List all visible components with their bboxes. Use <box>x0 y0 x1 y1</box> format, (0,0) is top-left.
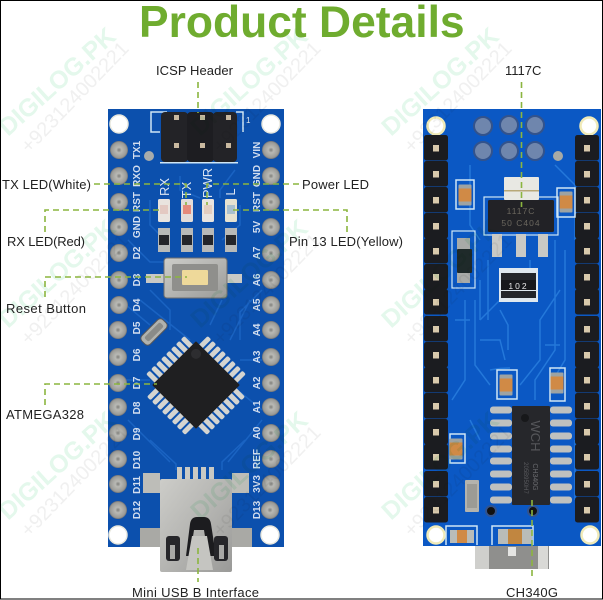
four status LEDs <box>158 199 237 222</box>
left pin labels: RXO <box>132 165 143 187</box>
right pin labels: A6 <box>252 273 263 286</box>
right pin labels: A0 <box>252 426 263 439</box>
watermarks: +923124002221 <box>17 38 133 157</box>
watermarks: +923124002221 <box>400 422 516 541</box>
label: ATMEGA328 <box>6 384 157 422</box>
watermarks: +923124002221 <box>17 422 133 541</box>
resistor array 102: 102 <box>508 281 529 291</box>
label: ATMEGA328: ATMEGA328 <box>6 407 84 422</box>
corner mounting holes <box>109 115 280 544</box>
right pin labels <box>252 142 263 519</box>
LED silkscreen labels <box>157 168 238 198</box>
left pin pads <box>109 141 128 519</box>
diode <box>452 231 475 288</box>
watermarks: +923124002221 <box>209 422 325 541</box>
PCB traces <box>120 170 262 470</box>
left pin labels: D10 <box>132 450 143 469</box>
left pin labels: D5 <box>132 321 143 334</box>
corner mounting holes <box>428 118 598 544</box>
left pin labels: D2 <box>132 246 143 259</box>
right pin labels: REF <box>252 449 263 469</box>
right pin labels: A2 <box>252 376 263 389</box>
small SMD capacitors <box>450 368 565 463</box>
right pin labels: A1 <box>252 400 263 413</box>
label: CH340G: CH340G <box>506 585 558 600</box>
PCB base <box>108 109 284 547</box>
left pin labels: D12 <box>132 500 143 519</box>
crystal <box>139 317 169 347</box>
label: RX LED(Red): RX LED(Red) <box>7 234 85 249</box>
right pin header <box>575 135 599 522</box>
left pin labels: D4 <box>132 298 143 311</box>
ICSP header <box>144 112 251 164</box>
label: TX LED(White) <box>2 177 186 205</box>
CH340G chip <box>490 406 572 505</box>
left pin header <box>424 135 448 522</box>
ICSP header: 1 <box>246 116 251 125</box>
LED silkscreen labels: TX <box>179 181 194 198</box>
PCB traces <box>452 165 575 500</box>
label: CH340G <box>506 500 558 600</box>
chip pins <box>135 324 257 446</box>
left pin labels: GND <box>132 216 143 238</box>
left pin labels: D11 <box>132 476 143 494</box>
LED silkscreen labels: PWR <box>200 168 215 198</box>
SMD capacitors near regulator <box>456 180 575 217</box>
four resistors <box>158 228 237 252</box>
right pin labels: A5 <box>252 298 263 311</box>
1117C regulator: 50 C404 <box>501 218 541 228</box>
CH340G chip: 205B950H7 <box>522 462 528 495</box>
label: Power LED <box>207 177 369 205</box>
right pin labels: 3V3 <box>252 475 263 493</box>
watermarks: DIGILOG.PK <box>185 214 313 333</box>
PCB base <box>423 109 601 546</box>
label: 1117C: 1117C <box>505 63 541 78</box>
label: Pin 13 LED(Yellow): Pin 13 LED(Yellow) <box>289 234 403 249</box>
left pin labels: RST <box>132 192 143 212</box>
label: ICSP Header <box>156 63 234 113</box>
1117C regulator <box>484 177 558 257</box>
mini USB connector underside <box>475 546 549 569</box>
left pin labels: D9 <box>132 427 143 440</box>
left pin labels: D6 <box>132 348 143 361</box>
right pin pads <box>261 141 280 519</box>
reset button <box>146 258 242 298</box>
right pin labels: A3 <box>252 350 263 363</box>
watermarks: +923124002221 <box>400 38 516 157</box>
resistor array 102 <box>499 268 538 302</box>
label: Mini USB B Interface: Mini USB B Interface <box>132 585 259 600</box>
ATMEGA328 chip <box>135 324 257 446</box>
watermarks: DIGILOG.PK <box>376 214 504 333</box>
right pin labels: A4 <box>252 323 263 336</box>
right pin labels: A7 <box>252 246 263 259</box>
label: Reset Button <box>6 277 187 316</box>
watermarks: DIGILOG.PK <box>185 22 313 141</box>
watermarks <box>0 22 516 541</box>
watermarks: +923124002221 <box>400 230 516 349</box>
LED silkscreen labels: L <box>223 188 238 196</box>
CH340G chip: CH340G <box>531 463 538 491</box>
mini USB connector <box>140 467 252 572</box>
label: RX LED(Red) <box>7 210 162 249</box>
left pin labels: D8 <box>132 401 143 414</box>
watermarks: DIGILOG.PK <box>376 406 504 525</box>
bottom crystal <box>465 480 538 516</box>
watermarks: +923124002221 <box>17 230 133 349</box>
watermarks: DIGILOG.PK <box>376 22 504 141</box>
right pin labels: RST <box>252 192 263 212</box>
label: Reset Button: Reset Button <box>6 301 86 316</box>
watermarks: DIGILOG.PK <box>185 406 313 525</box>
watermarks: +923124002221 <box>209 230 325 349</box>
label: ICSP Header: ICSP Header <box>156 63 234 78</box>
watermarks: +923124002221 <box>209 38 325 157</box>
ICSP through holes <box>474 116 563 161</box>
chip body <box>152 341 240 429</box>
left pin labels: D3 <box>132 273 143 286</box>
CH340G chip: WCH <box>528 420 543 452</box>
board: back view of Arduino Nano <box>423 109 601 569</box>
label: Mini USB B Interface <box>132 548 259 600</box>
label: Power LED: Power LED <box>302 177 369 192</box>
right pin labels: GND <box>252 165 263 187</box>
right pin labels: 5V <box>252 221 263 233</box>
left pin labels: D7 <box>132 376 143 389</box>
bottom SMD components <box>446 526 533 545</box>
LED silkscreen labels: RX <box>157 178 172 196</box>
label: TX LED(White): TX LED(White) <box>2 177 91 192</box>
right pin labels: VIN <box>252 142 263 158</box>
label: Pin 13 LED(Yellow) <box>230 210 403 249</box>
board: front view of Arduino Nano <box>108 109 284 572</box>
right pin labels: D13 <box>252 500 263 519</box>
left pin labels <box>132 140 143 519</box>
left pin labels: TX1 <box>132 140 143 159</box>
1117C regulator: 1117C <box>507 206 535 216</box>
